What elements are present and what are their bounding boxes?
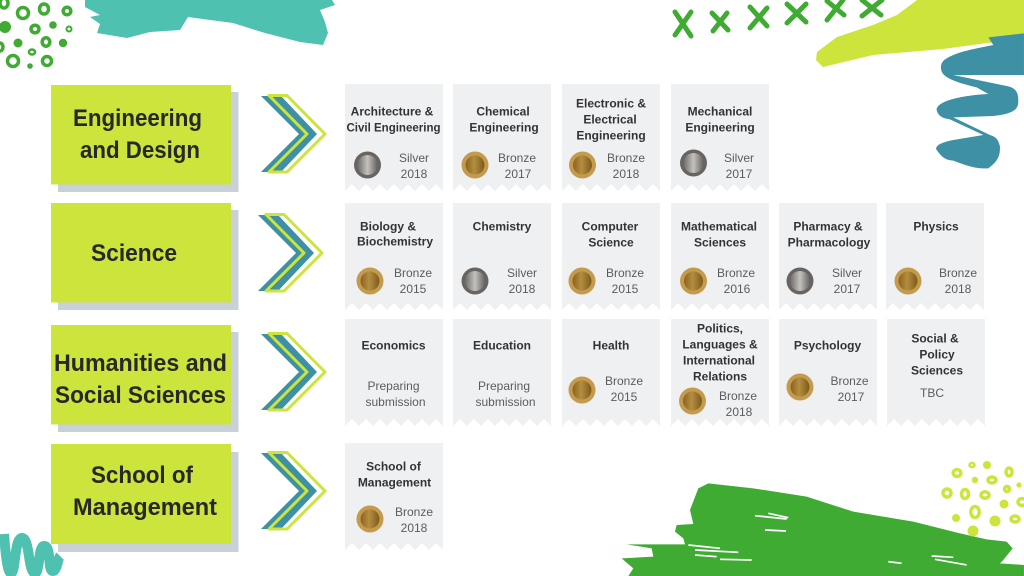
arrow: Engineering bbox=[261, 96, 325, 172]
card: Economics: Economics bbox=[361, 338, 426, 352]
card: Mathematical Sciences: Bronze bbox=[717, 266, 755, 280]
card: Biology and Biochemistry: Bronze bbox=[394, 266, 432, 280]
card: Education: submission bbox=[475, 395, 536, 409]
card: Chemistry: 2018 bbox=[509, 282, 536, 296]
card: Politics, Languages and International Relations bbox=[671, 319, 769, 426]
card: Mathematical Sciences: Mathematical bbox=[681, 220, 757, 234]
panel: Science heading bbox=[51, 203, 238, 310]
card: Education: Preparing bbox=[478, 379, 530, 393]
panel: Humanities and Social Sciences heading bbox=[51, 325, 238, 432]
panel: Humanities and Social Sciences heading: Humanities and bbox=[54, 350, 227, 377]
dots: green cluster top left bbox=[0, 0, 72, 69]
card: Health: Bronze bbox=[605, 374, 643, 388]
brush stroke: bottom left teal squiggle bbox=[4, 534, 60, 573]
panel: School of Management heading: School of bbox=[91, 462, 194, 489]
card: Chemistry bbox=[453, 203, 551, 310]
card: Economics: submission bbox=[365, 395, 426, 409]
card: Mathematical Sciences: Sciences bbox=[694, 236, 746, 250]
card: Architecture and Civil Engineering: Civil Engineering bbox=[346, 120, 440, 134]
card: Mathematical Sciences bbox=[671, 203, 769, 310]
card: Chemical Engineering: Bronze bbox=[498, 151, 536, 165]
card: Pharmacy and Pharmacology: Pharmacology bbox=[788, 236, 871, 250]
card: Electronic and Electrical Engineering: Electrical bbox=[583, 112, 637, 126]
panel: School of Management heading: Management bbox=[73, 494, 217, 521]
card: Physics bbox=[886, 203, 984, 310]
card: Psychology bbox=[779, 319, 877, 426]
brush stroke: top right lime bbox=[816, 0, 1024, 67]
panel: School of Management heading bbox=[51, 444, 238, 552]
panel: Science heading: Science bbox=[91, 240, 177, 267]
card: Politics, Languages and International Relations: Relations bbox=[693, 370, 747, 384]
card: School of Management bbox=[345, 443, 443, 550]
arrow: Science bbox=[258, 214, 322, 291]
card: Electronic and Electrical Engineering bbox=[562, 84, 660, 191]
card: Electronic and Electrical Engineering: Electronic & bbox=[576, 96, 646, 110]
card: Psychology: 2017 bbox=[838, 390, 865, 404]
panel: Humanities and Social Sciences heading: Social Sciences bbox=[55, 382, 226, 409]
card: Mechanical Engineering: Silver bbox=[724, 151, 754, 165]
dots: lime cluster bottom right bbox=[943, 461, 1024, 536]
card: Politics, Languages and International Relations: Languages & bbox=[682, 338, 758, 352]
card: Mathematical Sciences: 2016 bbox=[724, 282, 751, 296]
card: Psychology: Psychology bbox=[794, 338, 862, 352]
card: Social and Policy Sciences: Policy bbox=[919, 348, 955, 362]
card: Architecture and Civil Engineering bbox=[345, 84, 443, 191]
card: Biology and Biochemistry bbox=[345, 203, 443, 310]
card: Pharmacy and Pharmacology: Pharmacy & bbox=[793, 220, 863, 234]
card: Electronic and Electrical Engineering: 2018 bbox=[613, 167, 640, 181]
card: Physics: Physics bbox=[913, 220, 959, 234]
brush stroke: blue squiggle bbox=[936, 33, 1024, 168]
card: Economics: Preparing bbox=[367, 379, 420, 393]
card: Pharmacy and Pharmacology: 2017 bbox=[834, 282, 861, 296]
card: Mechanical Engineering: Engineering bbox=[685, 120, 755, 134]
card: Architecture and Civil Engineering: Silver bbox=[399, 151, 429, 165]
card: Computer Science: Bronze bbox=[606, 266, 644, 280]
card: Computer Science: Science bbox=[588, 236, 634, 250]
card: Politics, Languages and International Relations: 2018 bbox=[726, 405, 753, 419]
card: Health: 2015 bbox=[611, 390, 638, 404]
card: Chemical Engineering bbox=[453, 84, 551, 191]
card: Politics, Languages and International Relations: International bbox=[683, 354, 755, 368]
card: Mechanical Engineering: 2017 bbox=[726, 167, 753, 181]
card: Architecture and Civil Engineering: Architecture & bbox=[351, 104, 434, 118]
brush stroke: bottom green bbox=[622, 483, 1024, 576]
card: Mechanical Engineering bbox=[671, 84, 769, 191]
card: Computer Science: Computer bbox=[582, 220, 639, 234]
card: Health bbox=[562, 319, 660, 426]
panel: Engineering and Design heading: Engineering bbox=[73, 105, 202, 132]
card: Mechanical Engineering: Mechanical bbox=[688, 104, 752, 118]
card: Computer Science bbox=[562, 203, 660, 310]
card: Architecture and Civil Engineering: 2018 bbox=[401, 167, 428, 181]
card: Electronic and Electrical Engineering: Bronze bbox=[607, 151, 645, 165]
card: Psychology: Bronze bbox=[830, 374, 869, 388]
card: Physics: Bronze bbox=[939, 266, 977, 280]
card: Pharmacy and Pharmacology: Silver bbox=[832, 266, 862, 280]
card: Social and Policy Sciences: Sciences bbox=[911, 364, 963, 378]
card: Economics bbox=[345, 319, 443, 426]
card: Chemical Engineering: Chemical bbox=[476, 104, 530, 118]
card: School of Management: 2018 bbox=[401, 521, 428, 535]
card: School of Management: School of bbox=[366, 460, 422, 474]
card: Pharmacy and Pharmacology bbox=[779, 203, 877, 310]
card: School of Management: Management bbox=[358, 476, 431, 490]
card: Social and Policy Sciences bbox=[887, 319, 985, 426]
card: Education: Education bbox=[473, 338, 531, 352]
card: Biology and Biochemistry: 2015 bbox=[400, 282, 427, 296]
card: Biology and Biochemistry: Biochemistry bbox=[357, 234, 433, 248]
card: Electronic and Electrical Engineering: Engineering bbox=[576, 128, 646, 142]
card: Chemistry: Silver bbox=[507, 266, 537, 280]
card: Biology and Biochemistry: Biology & bbox=[360, 220, 416, 234]
icons: green crosses top bbox=[675, 0, 882, 36]
brush stroke: top teal bbox=[85, 0, 335, 45]
card: Politics, Languages and International Relations: Bronze bbox=[719, 389, 757, 403]
card: School of Management: Bronze bbox=[395, 505, 433, 519]
card: Chemical Engineering: 2017 bbox=[505, 167, 532, 181]
card: Chemistry: Chemistry bbox=[473, 220, 532, 234]
panel: Engineering and Design heading bbox=[51, 85, 238, 192]
card: Physics: 2018 bbox=[945, 282, 972, 296]
arrow: Management bbox=[261, 452, 325, 529]
arrow: Humanities bbox=[261, 334, 325, 410]
panel: Engineering and Design heading: and Design bbox=[80, 137, 200, 164]
card: Computer Science: 2015 bbox=[612, 282, 639, 296]
card: Education bbox=[453, 319, 551, 426]
card: Politics, Languages and International Relations: Politics, bbox=[697, 322, 743, 336]
card: Chemical Engineering: Engineering bbox=[469, 120, 539, 134]
card: Social and Policy Sciences: Social & bbox=[911, 332, 959, 346]
card: Health: Health bbox=[593, 338, 629, 352]
card: Social and Policy Sciences: TBC bbox=[920, 386, 944, 400]
